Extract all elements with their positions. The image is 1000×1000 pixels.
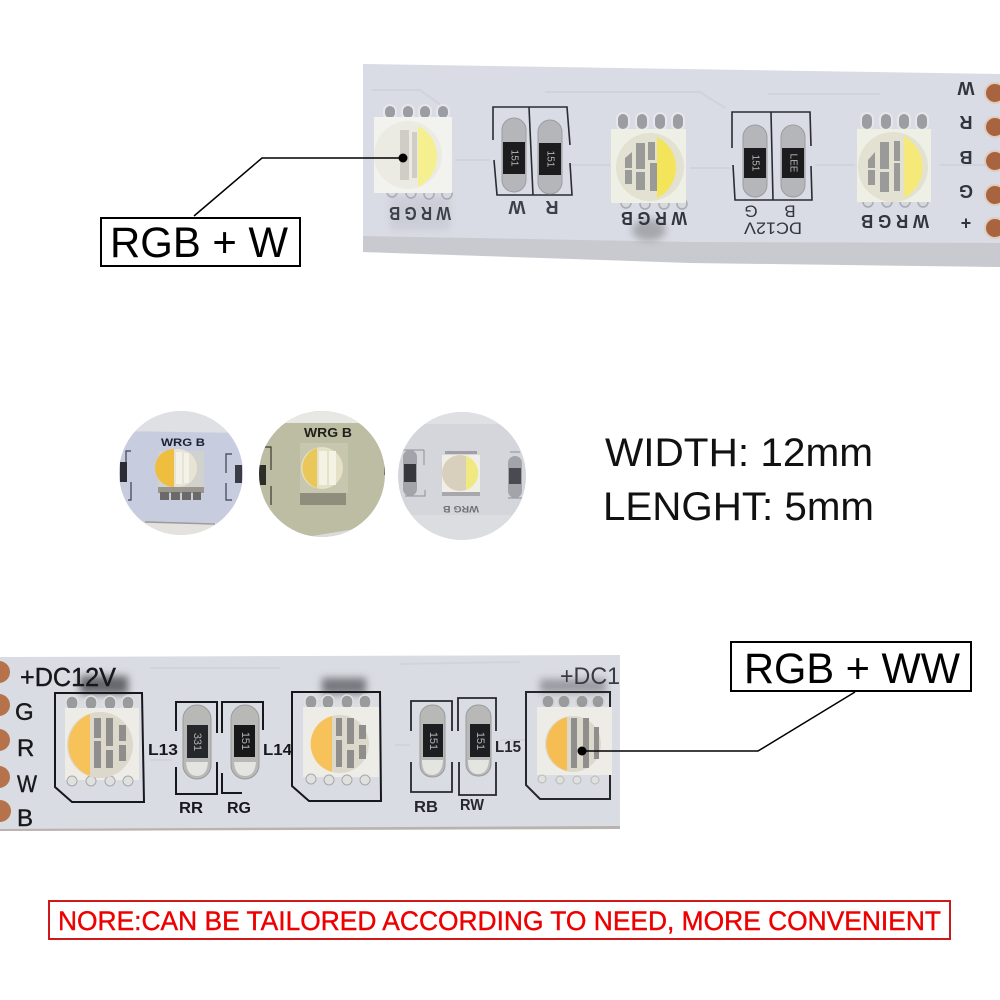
panel: close-up circle, warm white on olive [258,411,386,538]
text: connector labels: + [961,213,971,233]
text: LED 1 pin labels: W R G B [389,203,451,223]
icon: resistor pair B: 151 [427,732,439,750]
icon: copper pads [985,83,1000,238]
text: resistor labels B: L15 [495,739,521,756]
panel: top LED strip RGB + W [363,64,1000,267]
text: resistor labels A: RG [227,800,251,817]
text: resistor labels G, B and DC12V [743,202,802,238]
text: resistor labels B [414,739,521,816]
text: resistor labels W and R: W [508,197,526,217]
text: connector labels [958,78,974,233]
icon: LED chip A [55,693,144,802]
icon: LED chip 1 [374,105,452,199]
text: connector labels left: W [17,771,37,798]
text: resistor labels W and R: R [546,197,558,217]
icon: resistor pair 1: 151 [508,150,520,167]
icon: resistor pair 1 [493,107,572,195]
icon: LED chip B [292,692,381,801]
text: connector labels left: R [17,735,34,762]
panel: close-up circle, warm white on olive: WRG B [304,425,352,440]
text block: dimensions: LENGHT: 5mm [603,485,874,529]
text: resistor labels G, B and DC12V: B [784,202,796,220]
text: resistor labels A: L13 [148,742,178,759]
callout: RGB + WW: RGB + WW [744,645,960,693]
text: LED 3 pin labels: W R G B [861,211,929,231]
icon: resistor pair 2 [732,112,812,200]
text: connector labels left: B [17,805,33,832]
icon: copper pads left [0,661,11,822]
panel: close-up circle, warm white on blue-grey [119,411,244,536]
panel: close-up circle, warm white on blue-grey: WRG B [161,437,205,449]
icon: LED chip C [526,692,612,799]
text: resistor labels G, B and DC12V: G [744,202,758,220]
text: connector labels: W [958,78,974,98]
text: resistor labels A: RR [179,800,203,817]
icon: resistor pair B [411,698,496,795]
icon: resistor pair 2: 151 [750,155,760,172]
text: resistor labels A [148,742,292,817]
text: resistor labels B: RW [460,797,485,814]
icon: LED chip 2 [611,113,687,209]
text: resistor labels G, B and DC12V: DC12V [743,218,802,238]
icon: resistor pair 1: 151 [544,151,556,168]
text: connector labels left: +DC12V [20,662,117,692]
text: connector labels left [15,662,117,832]
note box: NORE:CAN BE TAILORED ACCORDING TO NEED, MORE CONVENIENT [58,906,941,936]
callout: RGB + WW [578,642,971,756]
text: connector labels: G [959,181,973,201]
icon: resistor pair 2: LEE [788,154,798,173]
text block: dimensions: WIDTH: 12mm [605,431,873,475]
icon: LED chip 3 [857,113,931,207]
icon: resistor pair A: 331 [191,733,203,751]
text: +DC1 clipped label: +DC1 [560,663,620,690]
panel: bottom LED strip RGB + WW [0,650,625,835]
panel: close-up circle, yellow-white on grey: WRG B [442,504,479,514]
text: connector labels: R [960,112,972,132]
panel: close-up circle, yellow-white on grey [396,412,526,540]
callout: RGB + W [101,154,408,267]
text: resistor labels B: RB [414,799,438,816]
text: LED 2 pin labels: W R G B [621,208,687,228]
icon: resistor pair A [176,702,263,794]
text: connector labels left: G [15,699,34,726]
text: connector labels: B [960,147,972,167]
icon: resistor pair A: 151 [239,732,251,750]
text: resistor labels W and R [508,197,558,217]
callout: RGB + W: RGB + W [110,219,288,267]
text: resistor labels A: L14 [263,742,292,759]
icon: resistor pair B: 151 [474,732,486,750]
text block: dimensions [603,431,874,529]
